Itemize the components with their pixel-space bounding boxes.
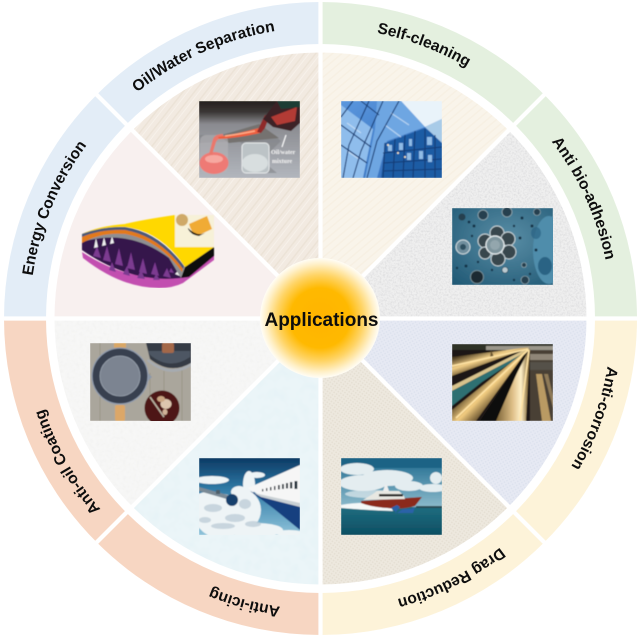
wedge: Anti-oil Coating	[54, 318, 320, 507]
ring segment: Drag Reduction	[320, 318, 544, 635]
ring segment: Oil/Water Separation	[97, 2, 320, 318]
image: oil/water separation beakers: mixture	[272, 159, 293, 165]
wedge: Oil/Water Separation	[132, 52, 320, 318]
label: Energy Conversion: Energy Conversion	[22, 142, 86, 275]
wedge: Energy Conversion	[54, 130, 320, 318]
wedge: Anti-corrosion	[320, 318, 586, 507]
label: Drag Reduction: Drag Reduction	[398, 548, 506, 606]
image: anti-oil coated pans	[90, 343, 191, 421]
wedge: Anti-icing	[132, 318, 320, 584]
image: oil/water separation beakers: Oil/water	[271, 150, 296, 156]
image: airplane above clouds	[199, 458, 300, 535]
wedge: Anti bio-adhesion	[320, 130, 586, 318]
image: energy conversion device	[81, 213, 215, 288]
panel wedges	[54, 52, 586, 584]
image: bacteria cells	[452, 208, 553, 285]
label: Anti-icing: Anti-icing	[209, 586, 280, 617]
hub title: Applications	[264, 310, 379, 331]
wedge: Self-cleaning	[320, 52, 509, 318]
ring segment: Anti-icing	[97, 318, 320, 635]
label: Self-cleaning: Self-cleaning	[378, 23, 470, 68]
label: Oil/Water Separation: Oil/Water Separation	[133, 23, 274, 90]
wedge: Drag Reduction	[320, 318, 509, 584]
ring segment: Energy Conversion	[4, 95, 320, 318]
image: golden pipelines	[452, 344, 553, 421]
image: glass building	[341, 101, 442, 178]
ring segment: Anti-oil Coating	[4, 318, 320, 542]
image: oil/water separation beakers	[199, 101, 300, 178]
label: Anti-oil Coating: Anti-oil Coating	[36, 410, 100, 513]
label: Anti bio-adhesion: Anti bio-adhesion	[552, 138, 614, 260]
image: hydrofoil boat	[341, 458, 442, 535]
ring segment: Anti-corrosion	[320, 318, 637, 542]
center hub	[260, 258, 380, 378]
ring segment: Self-cleaning	[320, 2, 544, 318]
hub sun	[260, 258, 380, 378]
ring segment: Anti bio-adhesion	[320, 95, 637, 318]
label: Anti-corrosion: Anti-corrosion	[572, 366, 618, 469]
